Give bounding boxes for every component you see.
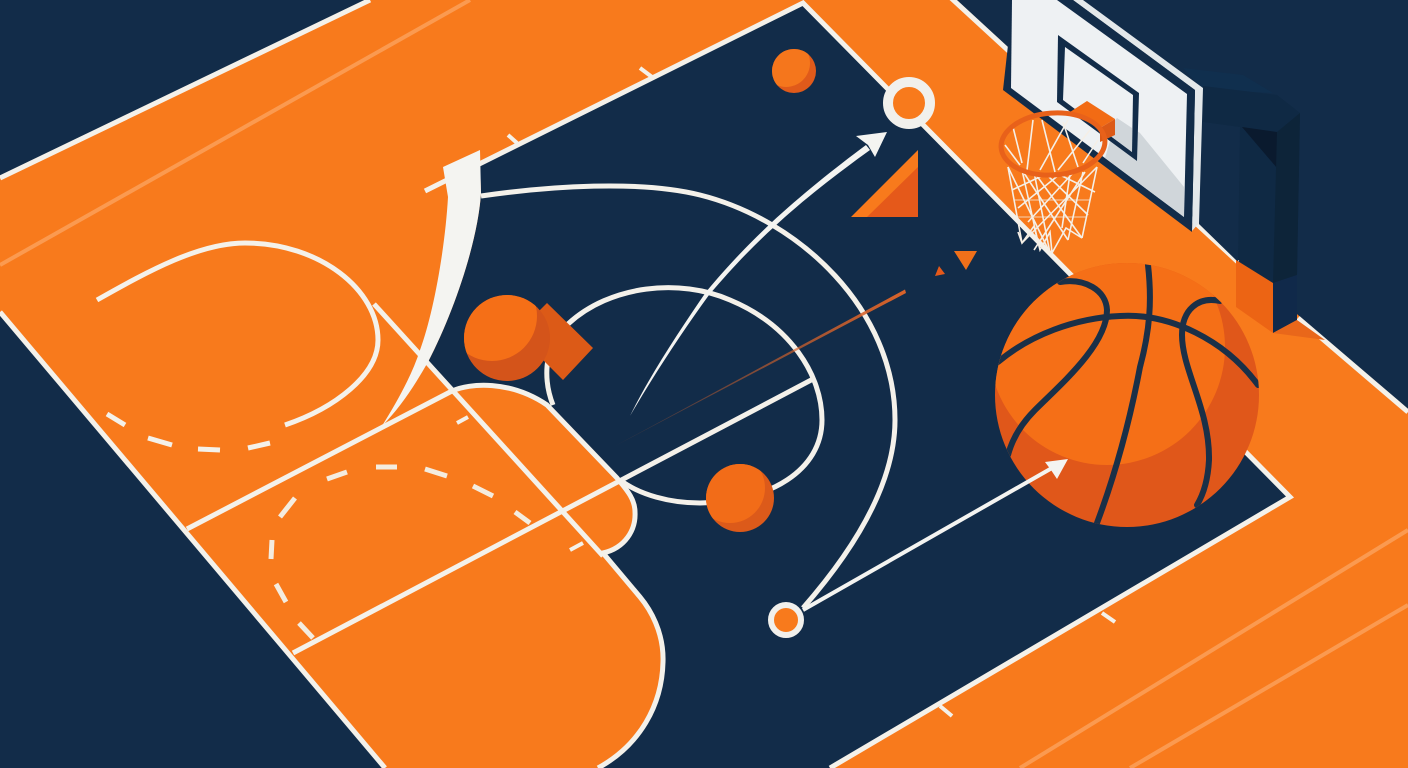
centre circle (547, 288, 822, 503)
top node ring (888, 82, 930, 124)
large triangle (851, 150, 918, 217)
court lines (187, 3, 1290, 768)
basketball (995, 263, 1259, 527)
backboard (1003, 0, 1203, 232)
tiny triangle (935, 266, 945, 276)
small triangle (954, 251, 977, 270)
navy half court (428, 3, 1290, 768)
small orange ball (772, 49, 816, 93)
white curved blade (382, 150, 481, 426)
curved arrow to top (630, 132, 887, 416)
net (1005, 120, 1098, 253)
whistle (464, 295, 593, 381)
arrow to basketball (803, 459, 1068, 610)
large arc (481, 186, 895, 608)
dashed lower arc (271, 467, 530, 638)
key outline (452, 385, 663, 768)
three point arc on left (97, 243, 378, 450)
rim (999, 109, 1107, 179)
support arm and column (1183, 68, 1325, 340)
lower node ring (771, 605, 801, 635)
pass streak (615, 290, 906, 446)
ball seams (998, 265, 1258, 523)
middle orange ball (706, 464, 774, 532)
rim bracket (1070, 101, 1115, 142)
